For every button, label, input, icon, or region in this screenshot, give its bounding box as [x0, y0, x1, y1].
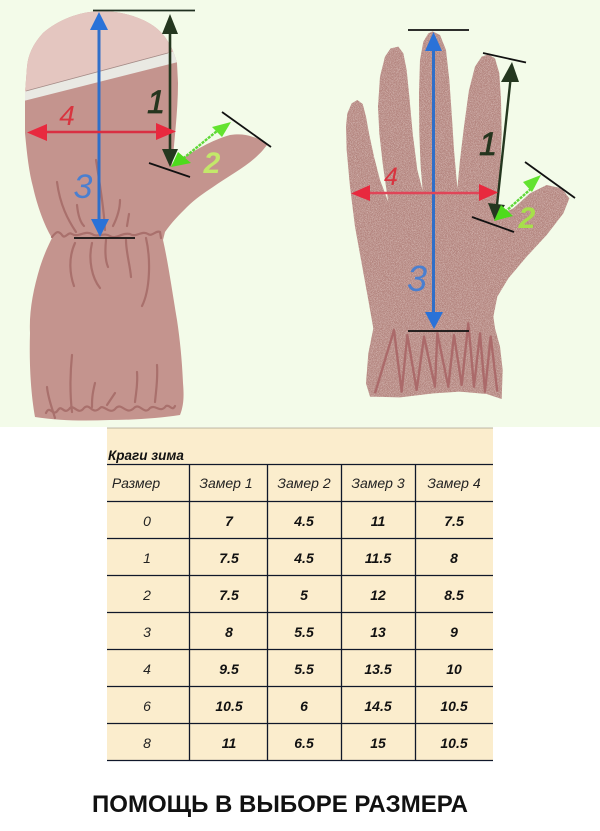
glove cuff ribs	[375, 323, 497, 393]
background panel	[0, 0, 600, 427]
row size 2	[142, 587, 464, 603]
arrow 1: dark green	[162, 14, 178, 167]
row size 4	[143, 661, 462, 677]
row size 2: 2	[142, 587, 151, 603]
row size 6: 10.5	[215, 698, 243, 714]
header row: Замер 4	[427, 475, 481, 491]
label 1: 1	[147, 84, 165, 120]
row size 0: 7	[225, 513, 234, 529]
arrow 2: light green	[171, 122, 231, 167]
glove illustration	[346, 30, 575, 399]
row size 0: 7.5	[444, 513, 464, 529]
glove label 2: 2	[518, 202, 536, 235]
row size 2: 12	[370, 587, 386, 603]
arrow 3: blue	[90, 12, 109, 237]
glove arrow 1: dark green	[488, 62, 519, 221]
row size 3	[143, 624, 458, 640]
row size 2: 5	[300, 587, 308, 603]
row size 6: 14.5	[364, 698, 392, 714]
glove label 3: 3	[407, 258, 427, 299]
table title: Краги зима	[108, 448, 184, 463]
row size 0: 0	[143, 513, 151, 529]
row size 6: 10.5	[440, 698, 468, 714]
header row: Замер 3	[351, 475, 405, 491]
glove arrow 4: red	[351, 184, 498, 201]
row size 1: 8	[450, 550, 458, 566]
row size 1: 4.5	[293, 550, 314, 566]
size table	[107, 428, 493, 761]
glove body	[346, 31, 569, 399]
row size 1: 7.5	[219, 550, 239, 566]
mitten gathers	[46, 160, 175, 418]
row size 0: 4.5	[293, 513, 314, 529]
row size 8: 11	[222, 735, 236, 751]
glove label 4: 4	[384, 163, 398, 191]
row size 4: 5.5	[294, 661, 314, 677]
label 3: 3	[74, 168, 93, 206]
row size 3: 5.5	[294, 624, 314, 640]
row size 6	[143, 698, 468, 714]
glove arrow 3: blue	[425, 32, 443, 329]
table background	[107, 428, 493, 760]
row size 4: 4	[143, 661, 151, 677]
header row	[112, 475, 481, 491]
header row: Замер 1	[199, 475, 253, 491]
row size 1	[143, 550, 458, 566]
label 2: 2	[203, 147, 221, 180]
row size 1: 1	[143, 550, 151, 566]
mitten body	[25, 11, 267, 421]
header row: Размер	[112, 475, 160, 491]
row size 8: 8	[143, 735, 151, 751]
row size 6: 6	[143, 698, 151, 714]
bottom title: ПОМОЩЬ В ВЫБОРЕ РАЗМЕРА	[92, 791, 468, 818]
row size 8: 6.5	[294, 735, 314, 751]
row size 4: 9.5	[219, 661, 239, 677]
row size 8: 15	[370, 735, 386, 751]
row size 3: 13	[370, 624, 386, 640]
row size 8: 10.5	[440, 735, 468, 751]
row size 4: 13.5	[364, 661, 392, 677]
row size 6: 6	[300, 698, 308, 714]
glove label 1: 1	[479, 126, 497, 162]
row size 2: 8.5	[444, 587, 464, 603]
mitten illustration	[25, 10, 272, 420]
label 4: 4	[59, 100, 75, 131]
row size 3: 9	[450, 624, 458, 640]
row size 8	[143, 735, 468, 751]
row size 1: 11.5	[365, 550, 391, 566]
glove arrow 2: light green	[494, 175, 541, 221]
row size 4: 10	[446, 661, 462, 677]
header row: Замер 2	[277, 475, 331, 491]
mitten fold-over top	[25, 11, 177, 101]
row size 3: 8	[225, 624, 233, 640]
arrow 4: red	[27, 123, 176, 141]
row size 0	[143, 513, 464, 529]
row size 2: 7.5	[219, 587, 239, 603]
glove limit lines	[408, 30, 575, 331]
row size 0: 11	[371, 513, 385, 529]
row size 3: 3	[143, 624, 151, 640]
measurement limit lines	[74, 10, 271, 238]
